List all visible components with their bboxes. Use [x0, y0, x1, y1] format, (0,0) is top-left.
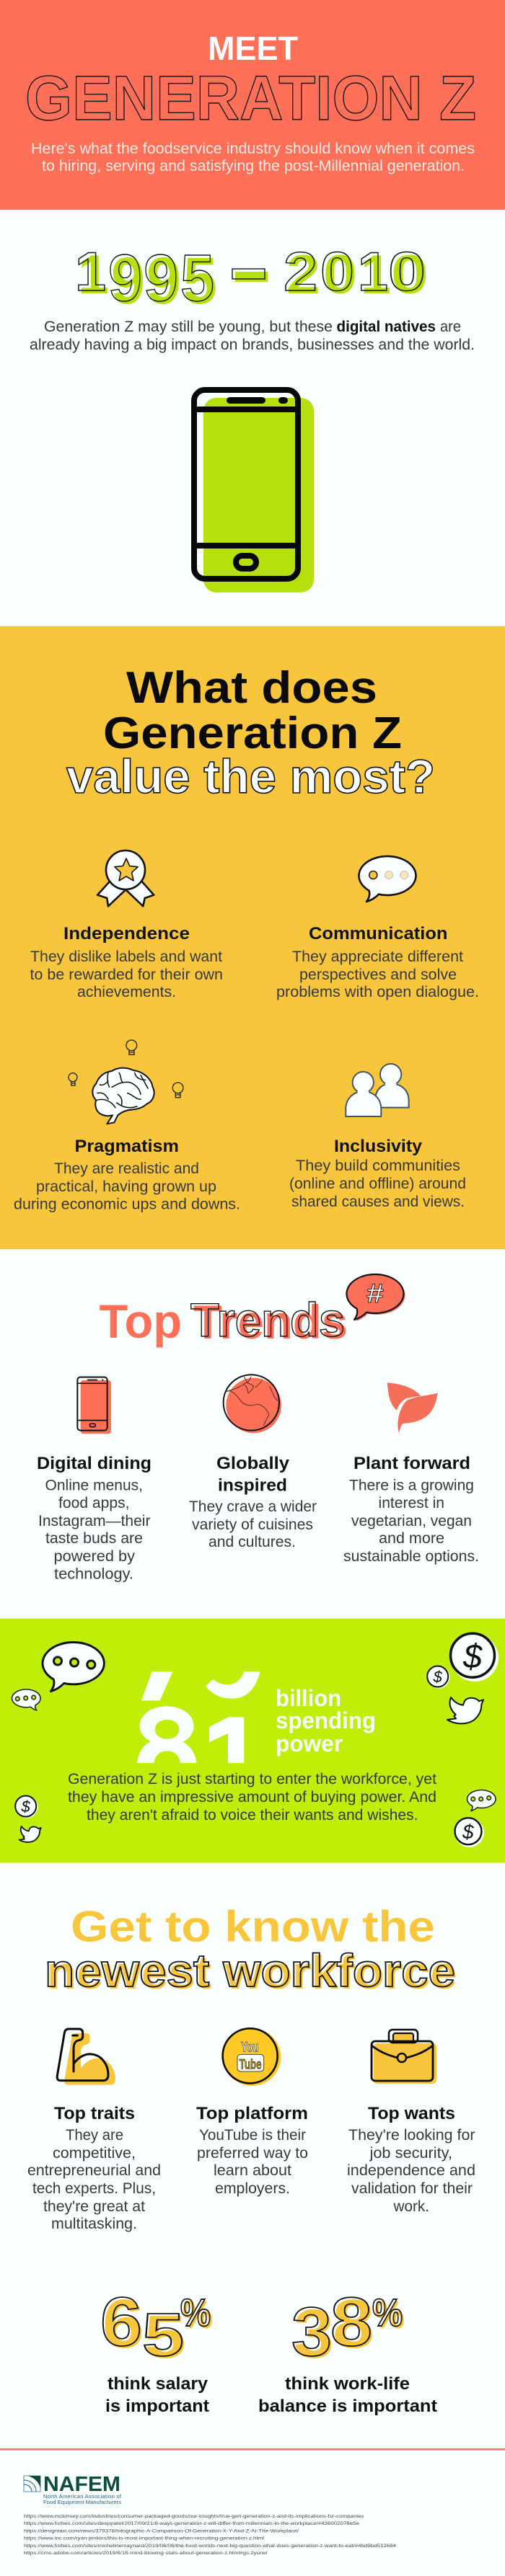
icon: hashtag speech bubble: # — [366, 1279, 384, 1308]
stat: 38 percent: 8 — [330, 2283, 372, 2360]
heading: 1995 – 2010: 9 — [144, 241, 178, 315]
icon: speech bubble — [359, 856, 416, 902]
stat: 65 percent: 5 — [142, 2301, 184, 2368]
heading: 1995 – 2010: 1 — [78, 244, 109, 306]
trend: digital dining: Instagram—their — [38, 1513, 150, 1529]
description text: Generation Z may still be young, but these — [44, 319, 333, 335]
trait: top traits: they're great at — [43, 2198, 145, 2215]
trend: digital dining — [37, 1454, 152, 1583]
text: billion spending power — [276, 1685, 376, 1756]
value: pragmatism: They are realistic and — [54, 1160, 199, 1177]
trend: digital dining: powered by — [53, 1548, 136, 1565]
stat: 65 percent: % — [180, 2291, 211, 2335]
wants: top wants: work. — [393, 2198, 429, 2215]
heading: 1995 – 2010: 0 — [320, 241, 354, 303]
wants: top wants: independence and — [347, 2162, 475, 2179]
trend: digital dining: food apps, — [58, 1495, 130, 1511]
heading: newest workforce: newest workforce — [45, 1945, 455, 1997]
heading: 1995 – 2010: 9 — [108, 241, 142, 315]
value: communication: Communication — [309, 924, 447, 943]
platform: top platform: employers. — [215, 2180, 290, 2197]
icon: small dollar coin — [427, 1666, 450, 1688]
value: inclusivity: (online and offline) around — [289, 1176, 466, 1192]
trend: digital dining: taste buds are — [45, 1530, 143, 1547]
heading: generation z: GENERATION Z — [25, 63, 476, 133]
trait: top traits: tech experts. Plus, — [32, 2180, 156, 2197]
icon: globe — [224, 1374, 281, 1433]
stat: 38 percent: 8 — [333, 2286, 374, 2363]
value: communication: problems with open dialogue. — [276, 984, 479, 1000]
heading: 1995 – 2010: 1 — [75, 241, 106, 303]
trait: top traits — [27, 2104, 161, 2232]
value: inclusivity: They build communities — [296, 1158, 460, 1174]
panel: spending power — [0, 1619, 505, 1862]
stat: 38 percent: balance is important — [258, 2397, 437, 2416]
intro text: to hiring, serving and satisfying the post-Millennial generation. — [42, 158, 465, 174]
heading: 1995 – 2010: 0 — [391, 244, 429, 306]
footer: sources: https://www.inc.com/ryan-jenkins/this-is-most-important-thing-when-recruiting-generation-z.html — [24, 2536, 265, 2541]
icon: ribbon badge — [97, 850, 154, 906]
value: pragmatism — [14, 1137, 240, 1212]
value: independence — [30, 924, 223, 1000]
stat: 38 percent: think work-life — [285, 2374, 410, 2394]
footer: sources — [24, 2514, 396, 2556]
stat: 38 percent: 3 — [291, 2293, 332, 2371]
icon: hashtag speech bubble — [346, 1274, 405, 1321]
value: pragmatism: practical, having grown up — [36, 1178, 216, 1195]
icon: dollar coin right: $ — [462, 1821, 474, 1843]
description text — [68, 1771, 436, 1824]
trend: globally inspired: and cultures. — [208, 1534, 296, 1550]
icon: dollar coin left — [15, 1796, 38, 1818]
footer: sources: https://designtaxi.com/news/379378/Infographic-A-Comparison-Of-Generation-X-Y-And-Z-At-The-Workplace/ — [24, 2528, 299, 2534]
icon: large dollar coin: $ — [462, 1637, 483, 1675]
heading: 1995 – 2010: 0 — [323, 244, 357, 306]
wants: top wants: They're looking for — [348, 2127, 475, 2144]
heading: 1995 – 2010: 1 — [361, 244, 391, 306]
footer: nafem logo: Food Equipment Manufacturers — [43, 2499, 121, 2505]
platform: top platform: YouTube is their — [199, 2127, 306, 2144]
heading: 1995 – 2010: 0 — [388, 241, 426, 303]
platform: top platform: preferred way to — [197, 2145, 308, 2162]
text: billion spending power: power — [276, 1731, 343, 1756]
icon: brain and light bulbs — [69, 1040, 183, 1124]
text: billion spending power: spending — [276, 1707, 376, 1733]
stat: 65 percent: % — [183, 2293, 213, 2337]
heading: 1995 – 2010 — [75, 241, 429, 318]
heading: top trends: Top — [100, 1294, 182, 1348]
description text: digital natives — [336, 319, 436, 335]
value: inclusivity: shared causes and views. — [291, 1194, 465, 1210]
trait: top traits: multitasking. — [51, 2216, 137, 2232]
heading: 1995 – 2010: 5 — [180, 241, 214, 315]
heading: 1995 – 2010: 5 — [183, 244, 217, 318]
heading: what does generation z: What does — [126, 663, 377, 713]
panel: birth years — [30, 241, 475, 592]
trend: globally inspired — [189, 1454, 317, 1550]
heading: top trends — [100, 1293, 348, 1349]
icon: youtube badge: Tube — [240, 2057, 262, 2072]
stat: 38 percent: % — [372, 2291, 403, 2335]
intro text: Here's what the foodservice industry should know when it comes — [31, 141, 475, 157]
description text: they aren't afraid to voice their wants and wishes. — [87, 1807, 418, 1824]
description text: are — [440, 319, 461, 335]
description text: already having a big impact on brands, businesses and the world. — [30, 337, 475, 353]
icon: dollar coin left: $ — [20, 1798, 30, 1816]
trend: digital dining: Digital dining — [37, 1454, 152, 1473]
icon: flexed arm — [57, 2029, 115, 2085]
trend: plant forward: interest in — [378, 1495, 444, 1511]
trend: globally inspired: Globally — [216, 1454, 289, 1473]
wants: top wants: validation for their — [351, 2180, 473, 2197]
icon: briefcase — [372, 2030, 436, 2084]
description text: Generation Z is just starting to enter the workforce, yet — [68, 1771, 436, 1787]
footer: nafem logo: North American Association of — [43, 2493, 122, 2500]
icon: large dollar coin — [450, 1633, 499, 1682]
icon: two people — [346, 1064, 409, 1116]
stat: 38 percent: % — [374, 2293, 405, 2337]
intro text — [31, 141, 475, 174]
footer: sources: https://www.forbes.com/sites/michelinemaynard/2019/06/06/the-food-worlds-next-big-question-what-does-generation-z-want-to-eat/#4bd9bd512684 — [24, 2544, 396, 2549]
description text: they have an impressive amount of buying power. And — [68, 1789, 436, 1806]
value: independence: Independence — [63, 924, 190, 943]
trend: digital dining: technology. — [54, 1565, 133, 1583]
heading: what does generation z — [103, 663, 402, 758]
icon: small phone — [77, 1377, 111, 1434]
heading: 1995 – 2010: 1 — [358, 241, 388, 303]
footer: sources: https://www.mckinsey.com/industries/consumer-packaged-goods/our-insights/true-gen-generation-z-and-its-implications-for-companies — [24, 2514, 364, 2519]
panel: workforce — [27, 1903, 475, 2416]
trait: top traits: competitive, — [53, 2145, 136, 2162]
trend: globally inspired: inspired — [218, 1476, 287, 1495]
panel: values — [0, 626, 505, 1249]
heading: 1995 – 2010: 9 — [111, 244, 145, 318]
value: pragmatism: Pragmatism — [75, 1137, 179, 1156]
footer: nafem logo — [24, 2473, 122, 2505]
trend: plant forward: Plant forward — [354, 1454, 470, 1473]
text: billion spending power: billion — [276, 1685, 341, 1711]
icon: bird left — [19, 1826, 41, 1842]
platform: top platform: Top platform — [196, 2104, 308, 2123]
wants: top wants: job security, — [369, 2145, 452, 2162]
trait: top traits: Top traits — [54, 2104, 135, 2123]
icon: small speech bubble left — [12, 1689, 40, 1710]
trend: globally inspired: They crave a wider — [189, 1498, 317, 1515]
stat: 65 percent: 6 — [102, 2286, 144, 2363]
icon: dollar coin right — [454, 1818, 484, 1847]
value: communication: perspectives and solve — [299, 967, 457, 983]
value: pragmatism: during economic ups and downs. — [14, 1196, 240, 1212]
wants: top wants: Top wants — [368, 2104, 455, 2123]
icon: youtube badge: You — [241, 2040, 258, 2056]
description text — [30, 319, 475, 353]
icon: youtube badge — [223, 2028, 281, 2086]
wants: top wants — [347, 2104, 475, 2215]
heading: value the most: value the most? — [66, 750, 435, 803]
heading: 1995 – 2010: 2 — [286, 244, 320, 306]
icon: small speech bubble right — [467, 1790, 496, 1811]
heading: what does generation z: Generation Z — [103, 709, 402, 758]
stat: 65 percent: 5 — [144, 2303, 186, 2371]
icon: large speech bubble — [43, 1643, 105, 1692]
heading: 1995 – 2010: 9 — [146, 244, 181, 318]
panel: top trends — [37, 1274, 479, 1583]
trend: plant forward: sustainable options. — [343, 1548, 479, 1565]
trend: digital dining: Online menus, — [45, 1478, 143, 1493]
stat: 65 percent: is important — [105, 2397, 209, 2416]
trend: plant forward: There is a growing — [349, 1478, 474, 1493]
stat: 65 percent: 6 — [100, 2283, 142, 2360]
icon: small dollar coin: $ — [433, 1668, 443, 1686]
trend: plant forward: and more — [379, 1530, 444, 1547]
value: independence: achievements. — [77, 984, 176, 1000]
value: inclusivity: Inclusivity — [334, 1137, 422, 1156]
value: inclusivity — [289, 1137, 466, 1210]
heading: get to know the: Get to know the — [71, 1903, 435, 1951]
heading: top trends: Trends — [190, 1293, 345, 1346]
icon: plant leaves — [387, 1382, 438, 1434]
footer: nafem logo: NAFEM — [43, 2473, 120, 2496]
value: independence: They dislike labels and want — [30, 949, 222, 965]
footer: sources: https://cmo.adobe.com/articles/2019/6/15-mind-blowing-stats-about-generation-z.html#gs.2yurwr — [24, 2551, 268, 2556]
platform: top platform — [196, 2104, 308, 2197]
value: communication — [276, 924, 479, 1000]
value: independence: to be rewarded for their own — [30, 967, 223, 983]
stat: 38 percent: 3 — [294, 2296, 334, 2373]
trend: globally inspired: variety of cuisines — [192, 1516, 313, 1533]
heading: newest workforce: newest workforce — [47, 1947, 457, 1999]
value: communication: They appreciate different — [292, 949, 463, 965]
figure: cropped 81 numeral — [137, 1671, 260, 1763]
footer: sources: https://www.forbes.com/sites/deeppatel/2017/09/21/8-ways-generation-z-will-differ-from-millennials-in-the-workplace/#436002076e5e — [24, 2521, 359, 2526]
stat: 38 percent — [258, 2283, 437, 2416]
heading: top trends: Trends — [193, 1295, 348, 1349]
heading: 1995 – 2010: 2 — [284, 241, 317, 303]
panel: header — [0, 0, 505, 210]
trait: top traits: entrepreneurial and — [27, 2162, 161, 2179]
stat: 65 percent: think salary — [107, 2374, 208, 2394]
stat: 65 percent — [100, 2283, 213, 2416]
icon: smartphone — [194, 390, 314, 592]
trend: plant forward: vegetarian, vegan — [351, 1513, 472, 1529]
trait: top traits: They are — [66, 2127, 123, 2144]
icon: bird right — [447, 1697, 483, 1723]
platform: top platform: learn about — [214, 2162, 291, 2179]
heading: meet: MEET — [208, 30, 298, 67]
trend: plant forward — [343, 1454, 479, 1565]
